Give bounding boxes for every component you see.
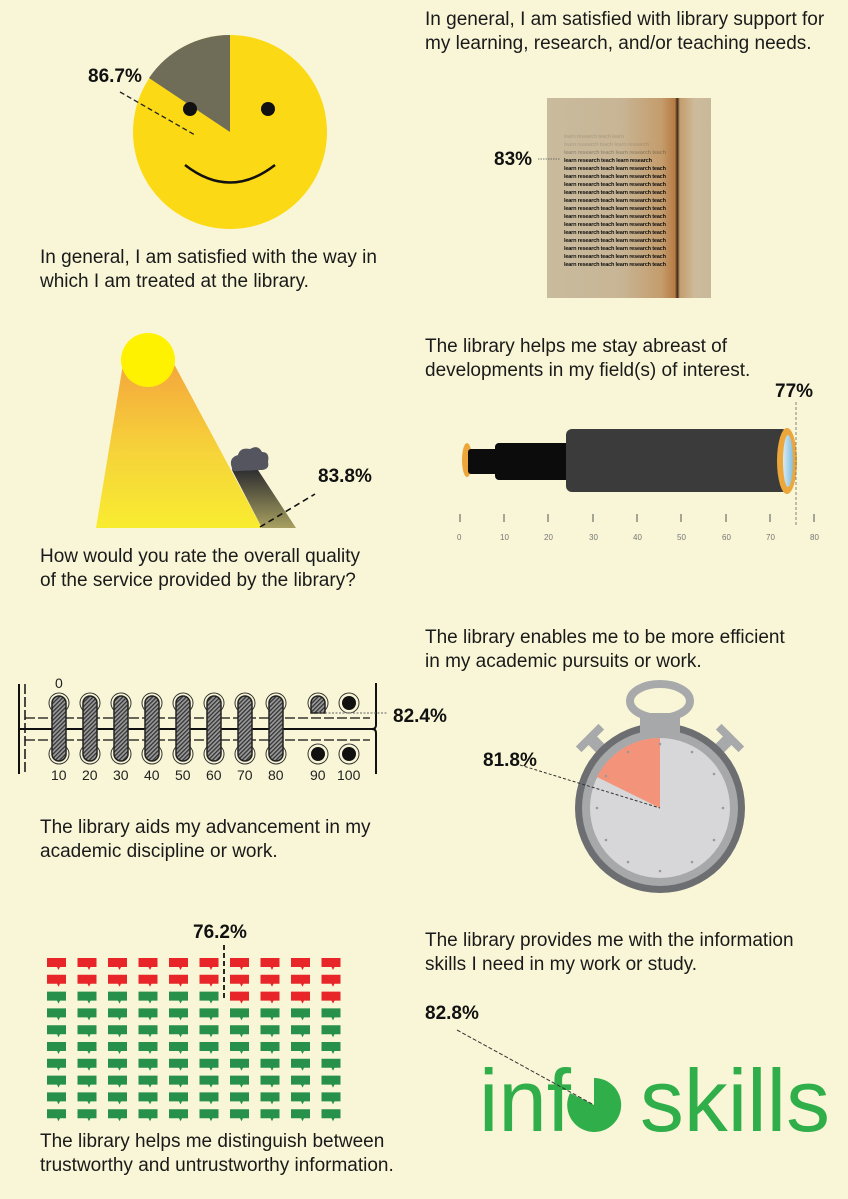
book image: learn research teach learn research teach [564,182,667,188]
book image: learn research teach learn research [564,142,650,148]
panel: stopwatch 81.8% [425,627,785,893]
question text: The library provides me with the information [425,930,794,951]
telescope chart: 60 [722,533,731,542]
question text: The library helps me stay abreast of [425,336,728,357]
info skills logo [479,1051,830,1150]
panel: info skills 82.8% [425,930,830,1150]
book image: learn research teach learn research teach [564,198,667,204]
spring chart: 0 [55,675,63,691]
spring chart: 80 [268,767,284,783]
panel: smiley 86.7%: which I am treated at the library. [39,271,309,292]
spring chart: 30 [113,767,129,783]
spring chart: 20 [82,767,98,783]
label 82.4%: 82.4% [393,706,447,727]
spring chart: 40 [144,767,160,783]
book image: learn research teach learn [564,134,625,140]
sun beam chart [96,333,296,528]
label 83%: 83% [494,149,532,170]
spring chart: 100 [337,767,361,783]
book image: learn research teach learn research teach [564,150,667,156]
book image: learn research teach learn research [564,158,653,164]
panel: smiley 86.7% [39,35,377,292]
question text: In general, I am satisfied with the way in [40,247,377,268]
telescope chart: 30 [589,533,598,542]
telescope chart: 0 [457,533,462,542]
spring chart: 50 [175,767,191,783]
panel: stopwatch 81.8%: in my academic pursuits or work. [425,651,702,672]
telescope chart: 10 [500,533,509,542]
telescope chart [457,428,819,542]
telescope chart: 40 [633,533,642,542]
panel: spring chart 82.4%: academic discipline or work. [40,841,278,862]
book image: learn research teach learn research teach [564,262,667,268]
telescope chart: 20 [544,533,553,542]
spring chart: 70 [237,767,253,783]
panel: telescope 77% [425,336,819,542]
book image: learn research teach learn research teach [564,214,667,220]
question text: The library enables me to be more efficient [425,627,785,648]
book image [547,98,711,298]
book image: learn research teach learn research teach [564,246,667,252]
telescope chart: 80 [810,533,819,542]
info skills logo: inf [479,1051,572,1150]
book image: learn research teach learn research teach [564,254,667,260]
bubble grid [47,958,340,1121]
panel: speech bubbles 76.2% [40,922,394,1176]
label 81.8%: 81.8% [483,750,537,771]
spring chart [19,675,376,783]
question text: The library helps me distinguish between [40,1131,384,1152]
panel: book 83% [425,9,825,298]
info skills logo: skills [640,1051,830,1150]
book image: learn research teach learn research teach [564,230,667,236]
spring chart: 10 [51,767,67,783]
label 76.2%: 76.2% [193,922,247,943]
book image: learn research teach learn research teach [564,174,667,180]
book image: learn research teach learn research teach [564,190,667,196]
smiley face chart [133,35,327,229]
label 77%: 77% [775,381,813,402]
label 82.8%: 82.8% [425,1003,479,1024]
panel: spring chart 82.4% [19,675,447,862]
panel: book 83%: my learning, research, and/or teaching needs. [425,33,812,54]
label 86.7%: 86.7% [88,66,142,87]
book image: learn research teach learn research teach [564,166,667,172]
panel: sun beam 83.8%: of the service provided by the library? [40,570,356,591]
spring chart: 90 [310,767,326,783]
panel: sun beam 83.8% [40,333,372,591]
book image: learn research teach learn research teach [564,222,667,228]
telescope chart: 50 [677,533,686,542]
label 83.8%: 83.8% [318,466,372,487]
question text: How would you rate the overall quality [40,546,361,567]
question text: In general, I am satisfied with library support for [425,9,825,30]
panel: telescope 77%: developments in my field(s) of interest. [425,360,750,381]
book image: learn research teach learn research teach [564,238,667,244]
stopwatch chart [575,684,745,893]
spring chart: 60 [206,767,222,783]
panel: info skills 82.8%: skills I need in my work or study. [425,954,697,975]
book image: learn research teach learn research teach [564,206,667,212]
telescope chart: 70 [766,533,775,542]
panel: speech bubbles 76.2%: trustworthy and untrustworthy information. [40,1155,394,1176]
question text: The library aids my advancement in my [40,817,371,838]
